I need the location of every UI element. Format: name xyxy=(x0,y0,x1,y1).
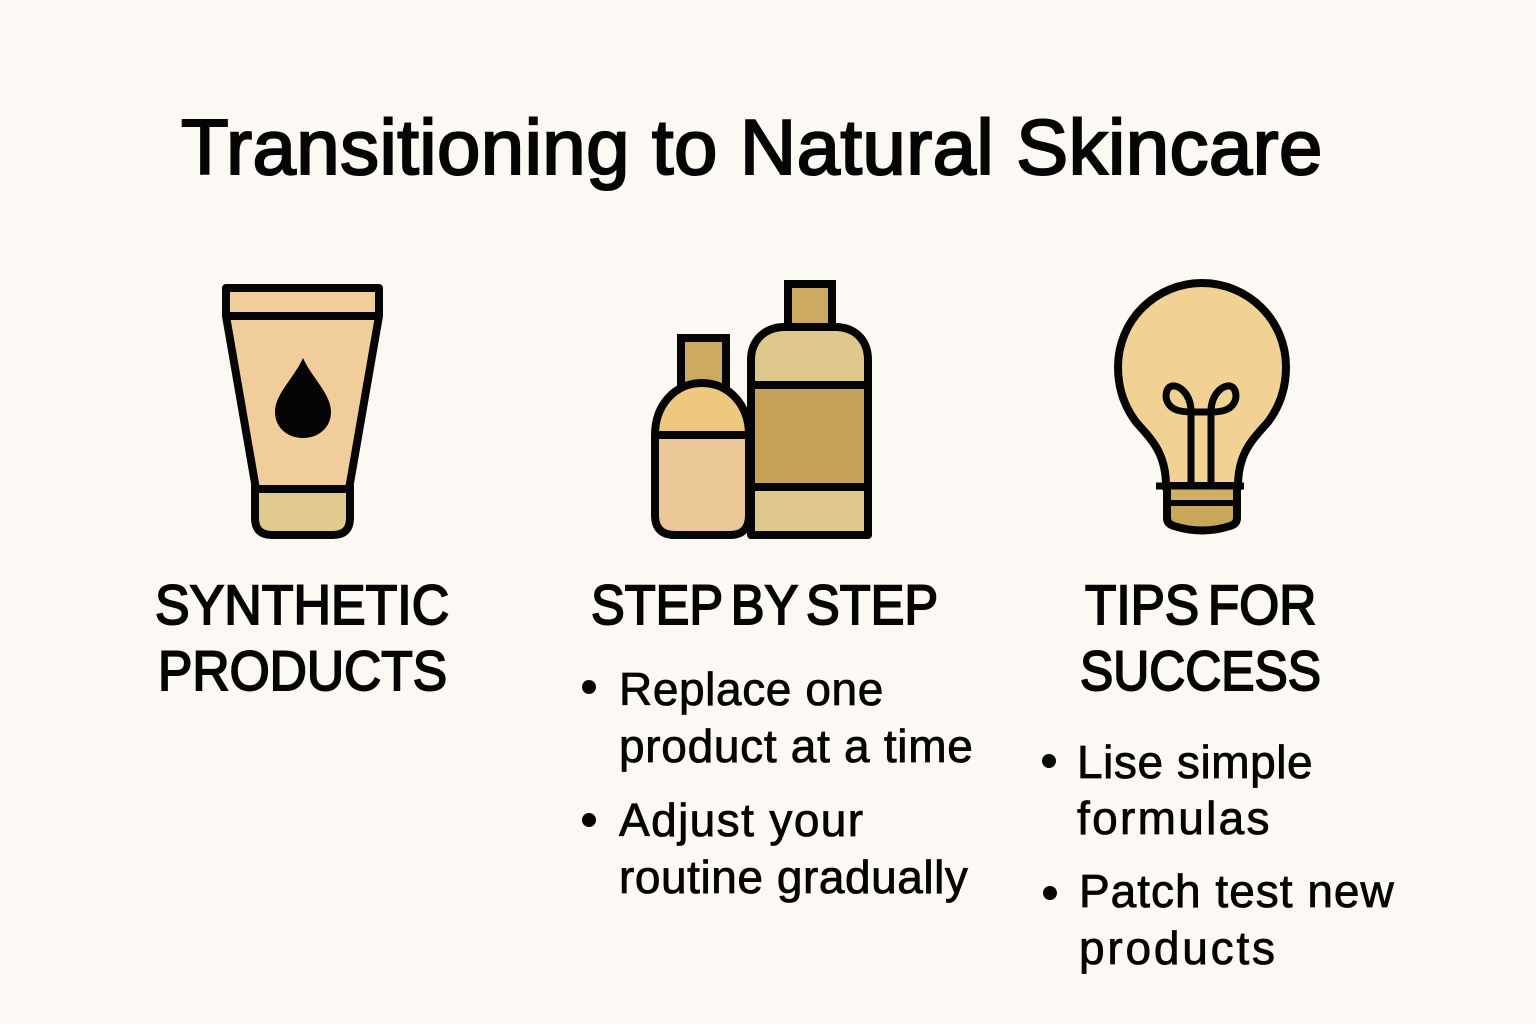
text block: tips list: formulas xyxy=(1077,792,1272,844)
text block: tips list: products xyxy=(1079,922,1278,974)
icon: light bulb xyxy=(1114,279,1290,534)
text block: tips list: Lise simple xyxy=(1077,736,1313,788)
heading: tips for success: TIPS FOR xyxy=(1085,573,1316,636)
heading: step by step: STEP BY STEP xyxy=(591,573,938,636)
text block: step by step list: routine gradually xyxy=(619,851,968,903)
heading: synthetic products: SYNTHETIC xyxy=(155,573,449,636)
text block: tips list xyxy=(1042,736,1395,974)
heading: synthetic products line 2: PRODUCTS xyxy=(158,639,447,702)
text block: step by step list: product at a time xyxy=(619,720,974,772)
icon: two bottles xyxy=(651,280,872,539)
text block: step by step list xyxy=(582,663,974,903)
title: Transitioning to Natural Skincare xyxy=(181,103,1323,191)
text block: step by step list: Replace one xyxy=(619,663,884,715)
text block: tips list: Patch test new xyxy=(1079,865,1395,917)
text block: step by step list: Adjust your xyxy=(619,794,865,846)
icon: tube with drop xyxy=(222,284,383,539)
heading: tips for success line 2: SUCCESS xyxy=(1080,639,1321,702)
